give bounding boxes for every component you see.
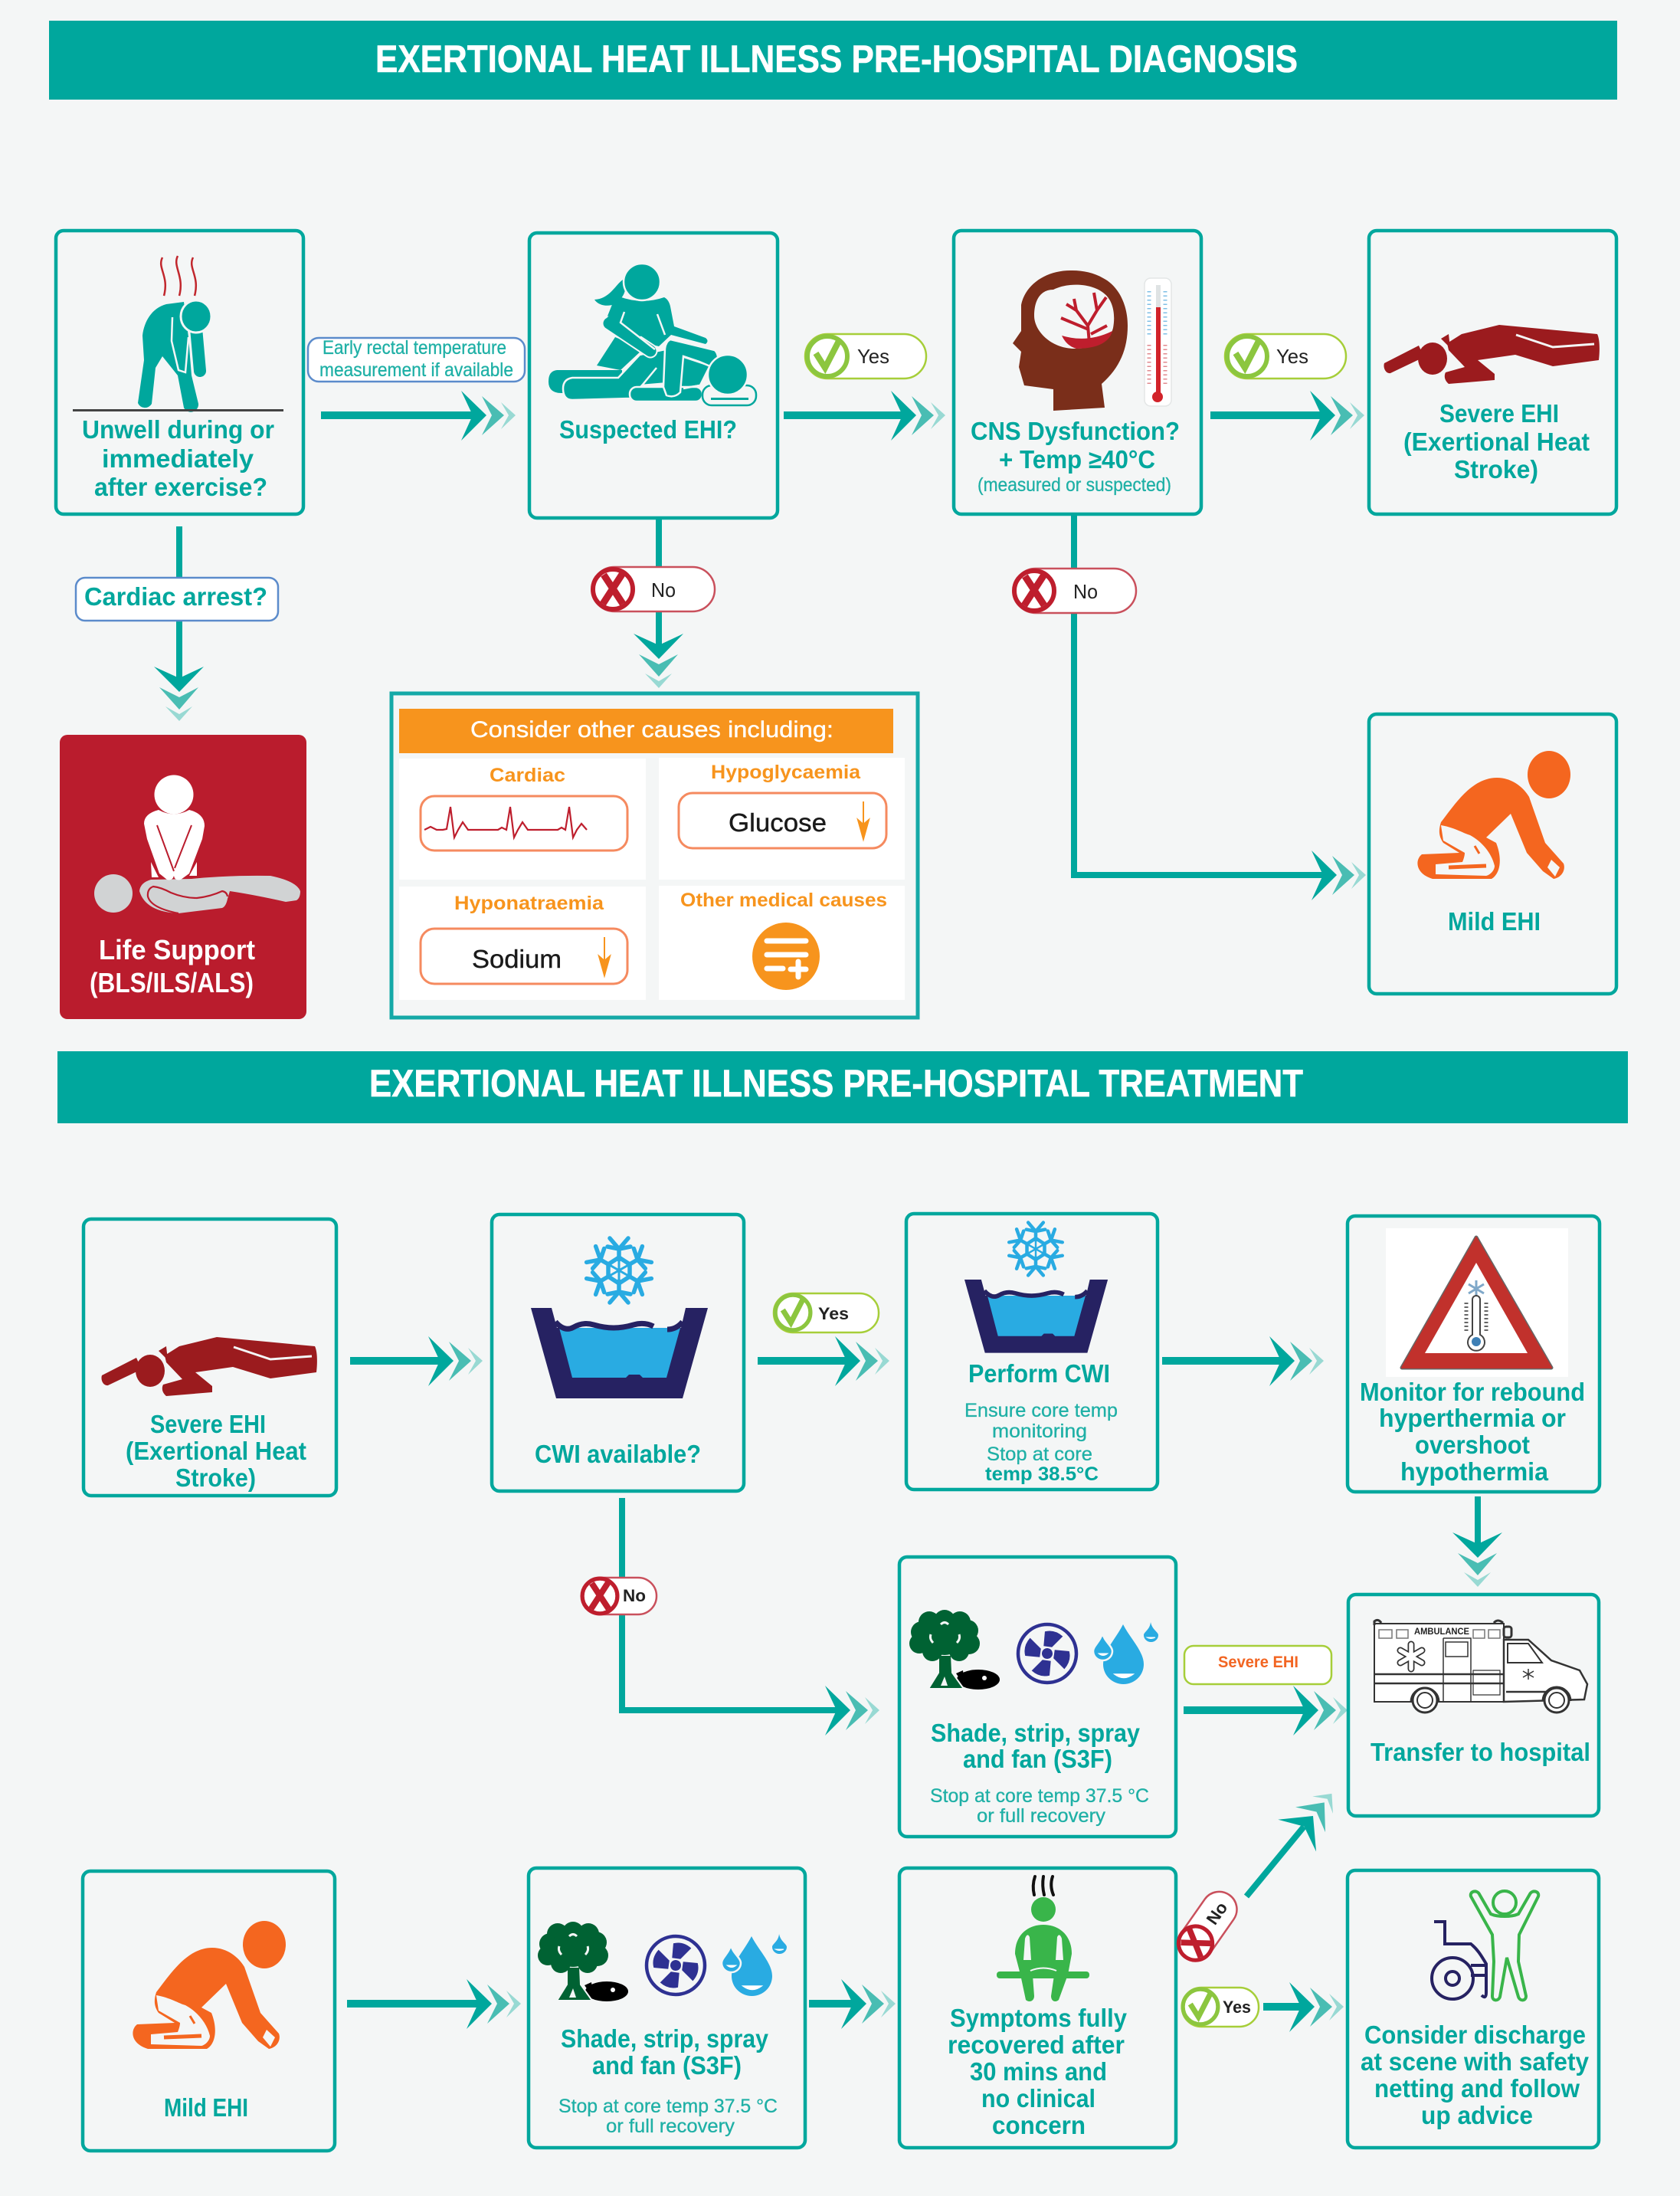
label text: Consider discharge	[1364, 2021, 1586, 2049]
label text: Monitor for rebound	[1360, 1378, 1585, 1406]
sub-panel: hyponatraemia: Sodium	[472, 945, 562, 973]
label text: Symptoms fully	[950, 2004, 1128, 2032]
label text: CNS Dysfunction?	[971, 417, 1180, 445]
callout: yes pill: Yes	[818, 1304, 849, 1323]
sub-panel: cardiac: Cardiac	[490, 765, 565, 786]
arrow: suspected EHI down to other causes	[634, 518, 683, 688]
callout: yes pill: Yes	[1276, 345, 1308, 368]
label text: hyperthermia or	[1379, 1404, 1566, 1432]
panel: S3F for mild EHI	[529, 1868, 805, 2148]
label text	[82, 415, 274, 501]
label text: Stroke)	[175, 1463, 256, 1492]
label text: Stop at core temp 37.5 °C	[930, 1785, 1149, 1807]
callout: no pill: No	[1073, 580, 1098, 603]
callout: no pill rotated	[1171, 1885, 1244, 1968]
label text: and fan (S3F)	[963, 1745, 1112, 1773]
label text: Shade, strip, spray	[931, 1719, 1141, 1747]
label text	[1361, 2021, 1590, 2129]
label text: temp 38.5°C	[985, 1463, 1099, 1485]
icon: first aider with patient	[549, 264, 756, 405]
icon: thermometer	[1145, 278, 1171, 406]
label text: (Exertional Heat	[1403, 428, 1590, 456]
callout: yes pill	[1225, 334, 1346, 379]
callout: early rectal temperature: Early rectal temperature	[323, 337, 506, 359]
label text	[1403, 399, 1590, 483]
icon: shade, fan and water	[909, 1610, 1158, 1690]
icon: ambulance	[1374, 1620, 1587, 1713]
callout: no pill	[582, 1578, 657, 1614]
label text: Shade, strip, spray	[561, 2024, 769, 2053]
label text: overshoot	[1415, 1431, 1530, 1459]
callout: yes pill: Yes	[1223, 1998, 1251, 2017]
label text: recovered after	[948, 2030, 1125, 2059]
label text: 30 mins and	[970, 2057, 1107, 2086]
label text: Stop at core	[987, 1444, 1092, 1465]
callout: cardiac arrest	[76, 578, 278, 621]
panel: monitor for rebound	[1348, 1216, 1600, 1492]
icon: kneeling person	[133, 1921, 286, 2049]
callout: early rectal temperature: measurement if available	[319, 359, 513, 381]
callout: severe EHI pill	[1184, 1646, 1331, 1684]
arrow: S3F to symptoms recovered	[809, 1979, 896, 2029]
heading: diagnosis banner	[49, 21, 1617, 100]
panel: perform CWI	[906, 1214, 1158, 1490]
icon: cold water tub	[531, 1308, 708, 1398]
sub-panel: cardiac	[399, 759, 646, 880]
label text: CWI available?	[535, 1440, 701, 1468]
label text	[1360, 1378, 1585, 1486]
panel: consider discharge	[1348, 1870, 1599, 2148]
icon: head with brain bleed	[1013, 270, 1128, 411]
panel: S3F for severe EHI	[899, 1557, 1176, 1837]
panel: severe EHI treatment	[84, 1219, 336, 1496]
arrow: CWI not available to S3F	[622, 1498, 879, 1735]
label text	[930, 1719, 1149, 1827]
label text	[558, 2024, 778, 2137]
sub-panel: other medical causes	[659, 886, 905, 1000]
panel: CWI available	[492, 1214, 744, 1491]
arrow: unwell to suspected EHI	[321, 391, 516, 441]
arrow: recovered to discharge	[1263, 1982, 1344, 2032]
icon: collapsed person	[101, 1337, 317, 1396]
arrow: CWI available to perform CWI	[758, 1336, 889, 1386]
sub-panel: other medical causes: Other medical causes	[680, 890, 887, 911]
label text: Life Support	[99, 934, 255, 965]
label text: no clinical	[981, 2084, 1095, 2112]
label text	[964, 1359, 1118, 1485]
sub-panel: hypoglycaemia	[659, 758, 905, 880]
label text: Stop at core temp 37.5 °C	[558, 2096, 778, 2117]
label text	[126, 1410, 306, 1492]
panel: CNS dysfunction	[954, 231, 1201, 514]
callout: no pill: No	[623, 1586, 646, 1605]
callout: yes pill	[1182, 1988, 1259, 2027]
arrow: perform CWI to monitor	[1162, 1336, 1324, 1386]
label text: + Temp ≥40°C	[999, 445, 1155, 474]
label text: Severe EHI	[150, 1410, 266, 1438]
panel: life support	[60, 735, 306, 1019]
label text	[971, 417, 1180, 496]
label text: Severe EHI	[1439, 399, 1559, 428]
arrow: unwell down to life support	[154, 526, 204, 721]
arrow: suspected EHI to CNS dysfunction	[784, 391, 945, 441]
arrow: not recovered to transfer	[1246, 1778, 1351, 1896]
arrow: mild EHI to S3F	[347, 1979, 521, 2029]
icon: collapsed person	[1384, 325, 1600, 384]
label text	[90, 934, 255, 998]
icon: shade, fan and water	[538, 1922, 787, 2001]
callout: early rectal temperature	[308, 337, 525, 382]
label text: (BLS/ILS/ALS)	[90, 967, 254, 998]
heading: treatment banner: EXERTIONAL HEAT ILLNESS PRE-HOSPITAL TREATMENT	[369, 1062, 1303, 1105]
label text: netting and follow	[1374, 2074, 1580, 2103]
panel: transfer to hospital	[1348, 1595, 1599, 1816]
label text: immediately	[102, 444, 254, 473]
heading: diagnosis banner: EXERTIONAL HEAT ILLNESS PRE-HOSPITAL DIAGNOSIS	[375, 38, 1298, 80]
label text	[948, 2004, 1128, 2139]
arrow: S3F to transfer	[1184, 1686, 1348, 1735]
icon: seated person	[997, 1876, 1089, 2001]
label text: Stroke)	[1454, 455, 1538, 483]
icon: cold water tub	[964, 1280, 1108, 1353]
label text: or full recovery	[606, 2116, 735, 2137]
callout: cardiac arrest: Cardiac arrest?	[84, 582, 267, 611]
callout: yes pill	[805, 334, 926, 379]
callout: yes pill: Yes	[857, 345, 889, 368]
label text: Unwell during or	[82, 415, 274, 444]
label text: (measured or suspected)	[978, 474, 1171, 496]
panel: consider other causes	[391, 693, 918, 1018]
icon: kneeling person	[1417, 751, 1570, 879]
arrow: CNS dysfunction to severe EHI	[1210, 391, 1364, 441]
callout: severe EHI pill: Severe EHI	[1218, 1654, 1298, 1671]
arrow: severe EHI to CWI available	[350, 1336, 483, 1386]
sub-panel: hyponatraemia	[399, 887, 646, 1000]
callout: no pill	[1014, 569, 1136, 613]
callout: no pill	[592, 567, 715, 611]
callout: yes pill	[774, 1293, 879, 1332]
icon: snowflake	[585, 1238, 653, 1303]
heading: consider other causes	[399, 709, 893, 753]
icon: overheated bent person	[73, 256, 283, 412]
label text: after exercise?	[94, 473, 267, 501]
panel: suspected EHI	[529, 233, 778, 518]
label text: concern	[992, 2111, 1086, 2139]
label text: up advice	[1421, 2101, 1533, 2129]
label text: Perform CWI	[968, 1359, 1110, 1388]
label text: Mild EHI	[164, 2093, 248, 2122]
label text: hypothermia	[1400, 1457, 1549, 1486]
icon: warning triangle with thermometer	[1386, 1228, 1568, 1377]
label text: Ensure core temp	[964, 1400, 1118, 1421]
sub-panel: hypoglycaemia: Glucose	[729, 808, 827, 837]
label text: at scene with safety	[1361, 2047, 1590, 2076]
label text: (Exertional Heat	[126, 1437, 306, 1465]
label text: Suspected EHI?	[559, 415, 737, 444]
heading: treatment banner	[57, 1051, 1628, 1123]
panel: severe EHI	[1369, 231, 1616, 514]
icon: person leaving wheelchair	[1432, 1891, 1538, 2000]
panel: symptoms recovered	[899, 1868, 1176, 2148]
label text: and fan (S3F)	[592, 2051, 742, 2080]
label text: monitoring	[992, 1421, 1087, 1442]
panel: mild EHI treatment	[83, 1871, 335, 2151]
callout: no pill: No	[651, 578, 676, 601]
icon: ambulance: AMBULANCE	[1414, 1626, 1469, 1637]
label text: or full recovery	[977, 1805, 1105, 1827]
arrow: CNS dysfunction no to mild EHI	[1074, 514, 1366, 900]
label text: Mild EHI	[1448, 907, 1541, 936]
panel: mild EHI	[1369, 714, 1616, 994]
panel: unwell during or after exercise	[56, 231, 303, 514]
sub-panel: hypoglycaemia: Hypoglycaemia	[711, 762, 861, 783]
icon: CPR	[94, 775, 300, 913]
heading: consider other causes: Consider other causes including:	[470, 717, 833, 742]
callout: no pill rotated: No	[1203, 1899, 1231, 1929]
sub-panel: hyponatraemia: Hyponatraemia	[454, 893, 604, 914]
arrow: monitor down to transfer	[1452, 1496, 1502, 1587]
label text: Transfer to hospital	[1371, 1738, 1590, 1766]
icon: snowflake	[1008, 1223, 1063, 1275]
